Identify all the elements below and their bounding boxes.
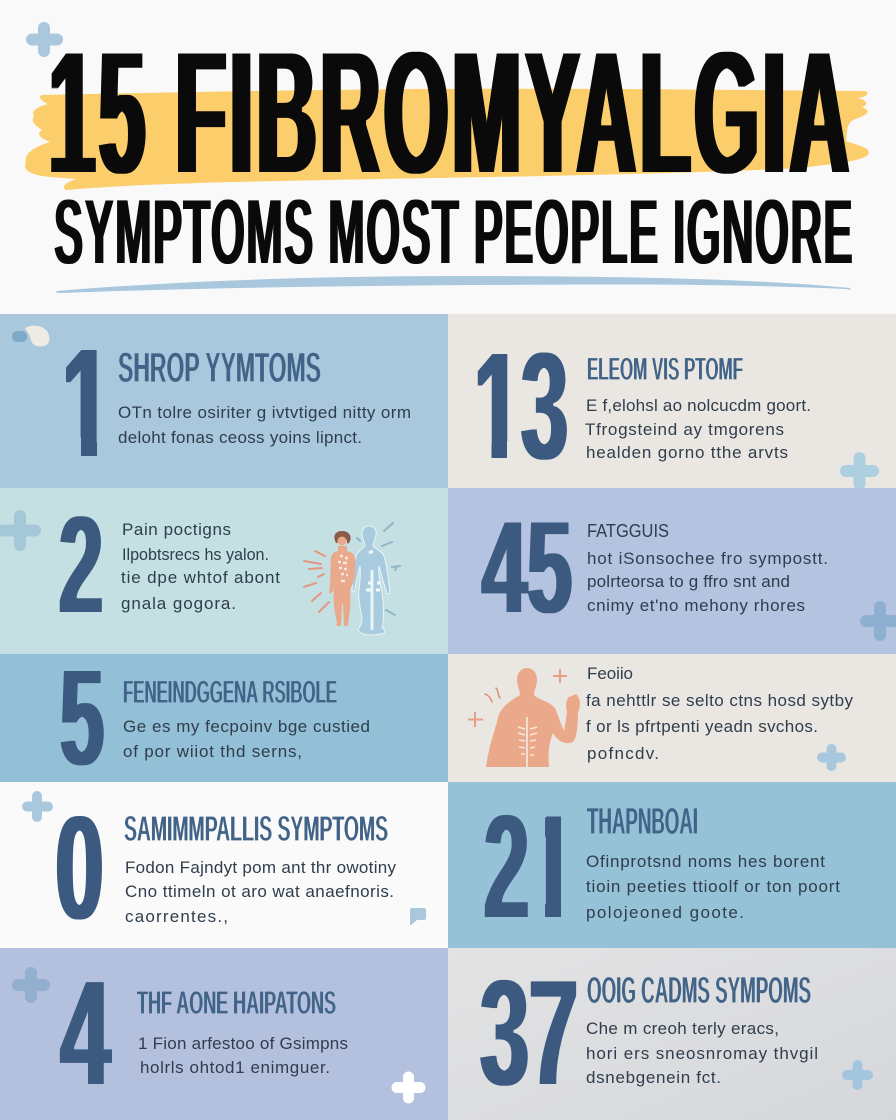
body text: 1 Fion arfestoo of Gsimpns: [138, 1034, 348, 1053]
panel: symptom 5: [0, 641, 448, 795]
pain marks: [485, 688, 500, 702]
icon: plus top left: [32, 28, 57, 51]
number 1: 1: [62, 316, 111, 491]
body text: Pain poctigns: [122, 520, 231, 539]
body text: Ilpobtsrecs hs yalon.: [122, 545, 269, 564]
blue figure joints: [366, 551, 380, 590]
body text: Ofinprotsnd noms hes borent: [586, 852, 825, 871]
body text: caorrentes.,: [125, 907, 228, 926]
body text: OTn tolre osiriter g ivtvtiged nitty orm: [118, 403, 411, 422]
icon: white plus: [397, 1077, 420, 1098]
underline swoosh: [56, 276, 851, 293]
panel: symptom 1: [0, 314, 448, 491]
number 21: 21: [484, 783, 574, 950]
body text: [123, 717, 370, 761]
panel: symptom 2: [0, 486, 448, 654]
header: [25, 13, 869, 293]
heading: SHROP YYMTOMS: [118, 344, 321, 392]
number 0: 0: [56, 784, 104, 951]
body text: of por wiiot thd serns,: [123, 742, 302, 761]
yellow brush highlight: [25, 89, 869, 190]
body text: Ge es my fecpoinv bge custied: [123, 717, 370, 736]
body text: healden gorno tthe arvts: [586, 443, 788, 462]
body text: [138, 1034, 348, 1077]
icon: plus: [846, 458, 873, 484]
heading: FATGGUIS: [587, 520, 669, 541]
body text: Tfrogsteind ay tmgorens: [585, 420, 784, 439]
icon: plus: [866, 607, 896, 635]
panel: symptom 0: [0, 782, 448, 951]
text: f or ls pfrtpenti yeadn svchos.: [586, 717, 818, 736]
orange pain rays: [304, 551, 329, 612]
head: [338, 536, 346, 546]
panel: symptom 37: [448, 948, 896, 1120]
body text: tie dpe whtof abont: [121, 568, 280, 587]
body text: gnala gogora.: [121, 594, 236, 613]
body text: dsnebgenein fct.: [586, 1068, 721, 1087]
hair: [334, 531, 351, 544]
panel: symptom 21: THAPNBOAI: [587, 801, 698, 843]
body text: tioin peeties ttioolf or ton poort: [586, 877, 840, 896]
body text: Fodon Fajndyt pom ant thr owotiny: [125, 858, 396, 877]
panel: symptom 21: [448, 782, 896, 950]
number 2: 2: [59, 486, 103, 643]
icon: plus: [27, 796, 48, 817]
number 45: 45: [482, 494, 572, 642]
icon: plus: [18, 973, 44, 997]
body text: hot iSonsochee fro sympostt.: [587, 549, 828, 568]
icon: plus: [822, 749, 841, 766]
orange plus right: [553, 669, 567, 683]
number 5: 5: [60, 641, 104, 795]
heading: THF AONE HAIPATONS: [137, 984, 336, 1021]
blue figure: [352, 526, 390, 635]
body text: [586, 1019, 818, 1087]
body text: Che m creoh terly eracs,: [586, 1019, 779, 1038]
body text: [587, 549, 828, 615]
body text: deloht fonas ceoss yoins lipnct.: [118, 428, 362, 447]
body text: hori ers sneosnromay thvgil: [586, 1044, 818, 1063]
back pain marks: [338, 556, 348, 581]
text: [586, 664, 854, 763]
text: Feoiio: [587, 664, 633, 683]
illustration: man's back: [468, 668, 580, 767]
blue pain rays: [357, 523, 400, 615]
panel: symptom 13: [448, 314, 896, 492]
orange plus left: [468, 712, 483, 727]
panel: symptom 45: [448, 488, 896, 654]
body text: Cno ttimeln ot aro wat anaefnoris.: [125, 882, 394, 901]
heading: SAMIMMPALLIS SYMPTOMS: [124, 808, 388, 849]
text: pofncdv.: [587, 744, 659, 763]
body: [486, 668, 580, 767]
text: fa nehttlr se selto ctns hosd sytby: [586, 691, 854, 710]
spine: [526, 717, 528, 767]
body text: cnimy et'no mehony rhores: [587, 596, 805, 615]
body text: polrteorsa to g ffro snt and: [587, 572, 790, 591]
icon: speech bubble: [410, 908, 426, 925]
illustration: two body figures: [304, 523, 400, 635]
icon: plus: [847, 1065, 868, 1085]
number 4: 4: [60, 948, 111, 1117]
body text: [118, 403, 411, 447]
body text: [121, 520, 280, 613]
heading: ELEOM VIS PTOMF: [587, 351, 743, 387]
body text: [586, 852, 840, 922]
number 13: 13: [474, 320, 568, 492]
icon: cream blob: [25, 326, 49, 346]
icon: plus: [3, 516, 35, 545]
ribs: [518, 727, 537, 755]
number 37: 37: [480, 948, 578, 1118]
icon: blue pill: [12, 331, 27, 342]
body text: [125, 858, 396, 926]
body text: polojeoned goote.: [586, 903, 744, 922]
body text: holrls ohtod1 enimguer.: [140, 1058, 330, 1077]
orange figure: [329, 546, 355, 626]
panel: symptom 4: [0, 948, 448, 1120]
panel: symptom back pain: [448, 654, 896, 782]
body text: E f,elohsl ao nolcucdm goort.: [586, 396, 811, 415]
body text: [585, 396, 811, 462]
heading: FENEINDGGENA RSIBOLE: [123, 674, 337, 710]
